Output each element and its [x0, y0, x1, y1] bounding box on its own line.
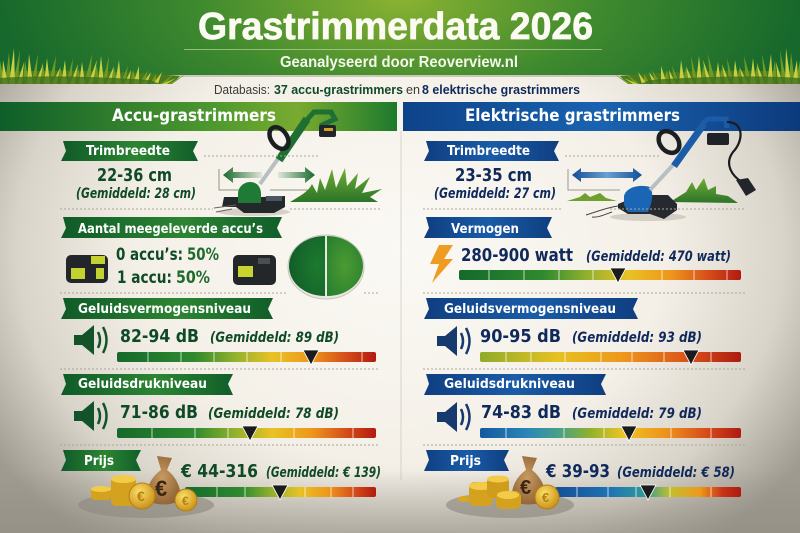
value: 0 accu's: 50% [187, 245, 219, 265]
ribbon [424, 298, 638, 319]
section: aantal accu's [61, 217, 364, 299]
section: trimbreedte [424, 141, 559, 202]
grass right [614, 48, 800, 84]
panel: accu-grastrimmers [0, 102, 397, 518]
section: geluidsvermogensniveau [424, 298, 741, 365]
illustration: blue trimmer with cord [586, 119, 756, 221]
icon: coins and money bag: € [542, 490, 549, 505]
ribbon [424, 374, 606, 395]
scale bar [117, 426, 376, 441]
average: (Gemiddeld: € 139) [266, 465, 381, 481]
average: (Gemiddeld: 78 dB) [208, 406, 339, 422]
value: 74-83 dB [481, 402, 561, 423]
icon: coins and money bag: € [520, 477, 531, 499]
database line: 37 accu-grastrimmers [274, 82, 403, 97]
subtitle: Geanalyseerd door Reoverview.nl [280, 54, 518, 71]
section: geluidsdrukniveau [61, 374, 376, 441]
database line: Databasis: [214, 82, 270, 97]
ribbon [424, 217, 552, 238]
section: prijs [61, 450, 381, 518]
average: (Gemiddeld: 27 cm) [434, 186, 556, 202]
icon: coins and money bag: € [137, 488, 145, 504]
average: (Gemiddeld: 28 cm) [76, 186, 196, 202]
section: prijs [424, 450, 741, 518]
ribbon: Geluidsdrukniveau [78, 377, 207, 392]
pie chart [288, 235, 364, 299]
icon: battery right [233, 255, 276, 285]
ribbon: Geluidsvermogensniveau [444, 302, 616, 317]
value: 82-94 dB [120, 326, 199, 347]
section: geluidsvermogensniveau [61, 298, 376, 365]
ribbon [61, 298, 273, 319]
scale bar [480, 350, 741, 365]
panel heading [0, 102, 397, 131]
scale bar [459, 268, 741, 283]
scale bar [185, 485, 376, 500]
section: geluidsdrukniveau [424, 374, 741, 441]
ribbon: Prijs [450, 454, 481, 469]
value: 71-86 dB [120, 402, 198, 423]
ribbon: Geluidsdrukniveau [444, 377, 575, 392]
database line: en [406, 82, 420, 97]
icon: speaker [74, 401, 106, 431]
illustration: width arrows [219, 167, 315, 190]
scale bar [555, 485, 741, 500]
value: € 44-316 [180, 461, 258, 482]
average: (Gemiddeld: 79 dB) [572, 406, 702, 422]
average: (Gemiddeld: 470 watt) [586, 249, 731, 265]
panel: elektrische grastrimmers [403, 102, 800, 518]
icon: lightning bolt [430, 245, 453, 283]
section: vermogen [424, 217, 741, 283]
title: Grastrimmerdata 2026 [198, 6, 593, 48]
ribbon [61, 374, 233, 395]
ribbon [61, 217, 282, 238]
ribbon: Geluidsvermogensniveau [78, 302, 251, 317]
icon: coins and money bag: € [155, 476, 167, 501]
average: (Gemiddeld: € 58) [617, 465, 735, 481]
section: trimbreedte [61, 141, 198, 202]
ribbon: Aantal meegeleverde accu’s [78, 222, 263, 237]
value: € 39-93 [545, 461, 610, 482]
value: 90-95 dB [480, 326, 561, 347]
illustration: green trimmer [214, 112, 336, 216]
panel heading: Elektrische grastrimmers [465, 106, 680, 126]
scale bar [117, 350, 376, 365]
database line [214, 82, 580, 97]
panel heading [403, 102, 800, 131]
icon: speaker [437, 402, 470, 432]
ribbon: Prijs [84, 454, 114, 469]
scale bar [480, 426, 741, 441]
average: (Gemiddeld: 93 dB) [572, 330, 702, 346]
value: 1 accu: 1 accu: [117, 268, 172, 288]
illustration: width arrow [568, 168, 642, 190]
average: (Gemiddeld: 89 dB) [210, 330, 339, 346]
database line: 8 elektrische grastrimmers [422, 82, 580, 97]
grass left [0, 48, 186, 84]
ribbon: Trimbreedte [86, 143, 170, 159]
illustration: grass tufts [567, 178, 738, 203]
icon: speaker [437, 326, 470, 356]
header banner [0, 0, 800, 77]
value: 0 accu's: 0 accu’s: [116, 245, 183, 265]
ribbon [424, 450, 509, 471]
ribbon [61, 450, 141, 471]
value: 22-36 cm [97, 165, 172, 186]
icon: coins and money bag [78, 456, 214, 518]
value: 1 accu: 50% [176, 268, 210, 288]
panel heading: Accu-grastrimmers [112, 106, 276, 126]
illustration: grass tuft [290, 168, 382, 202]
icon: battery left [66, 255, 108, 283]
icon: coins and money bag [446, 456, 574, 518]
icon: coins and money bag: € [182, 494, 189, 508]
value: 280-900 watt [461, 245, 573, 266]
ribbon: Trimbreedte [447, 143, 530, 159]
icon: speaker [74, 325, 106, 355]
value: 23-35 cm [455, 165, 532, 186]
ribbon: Vermogen [451, 222, 519, 237]
